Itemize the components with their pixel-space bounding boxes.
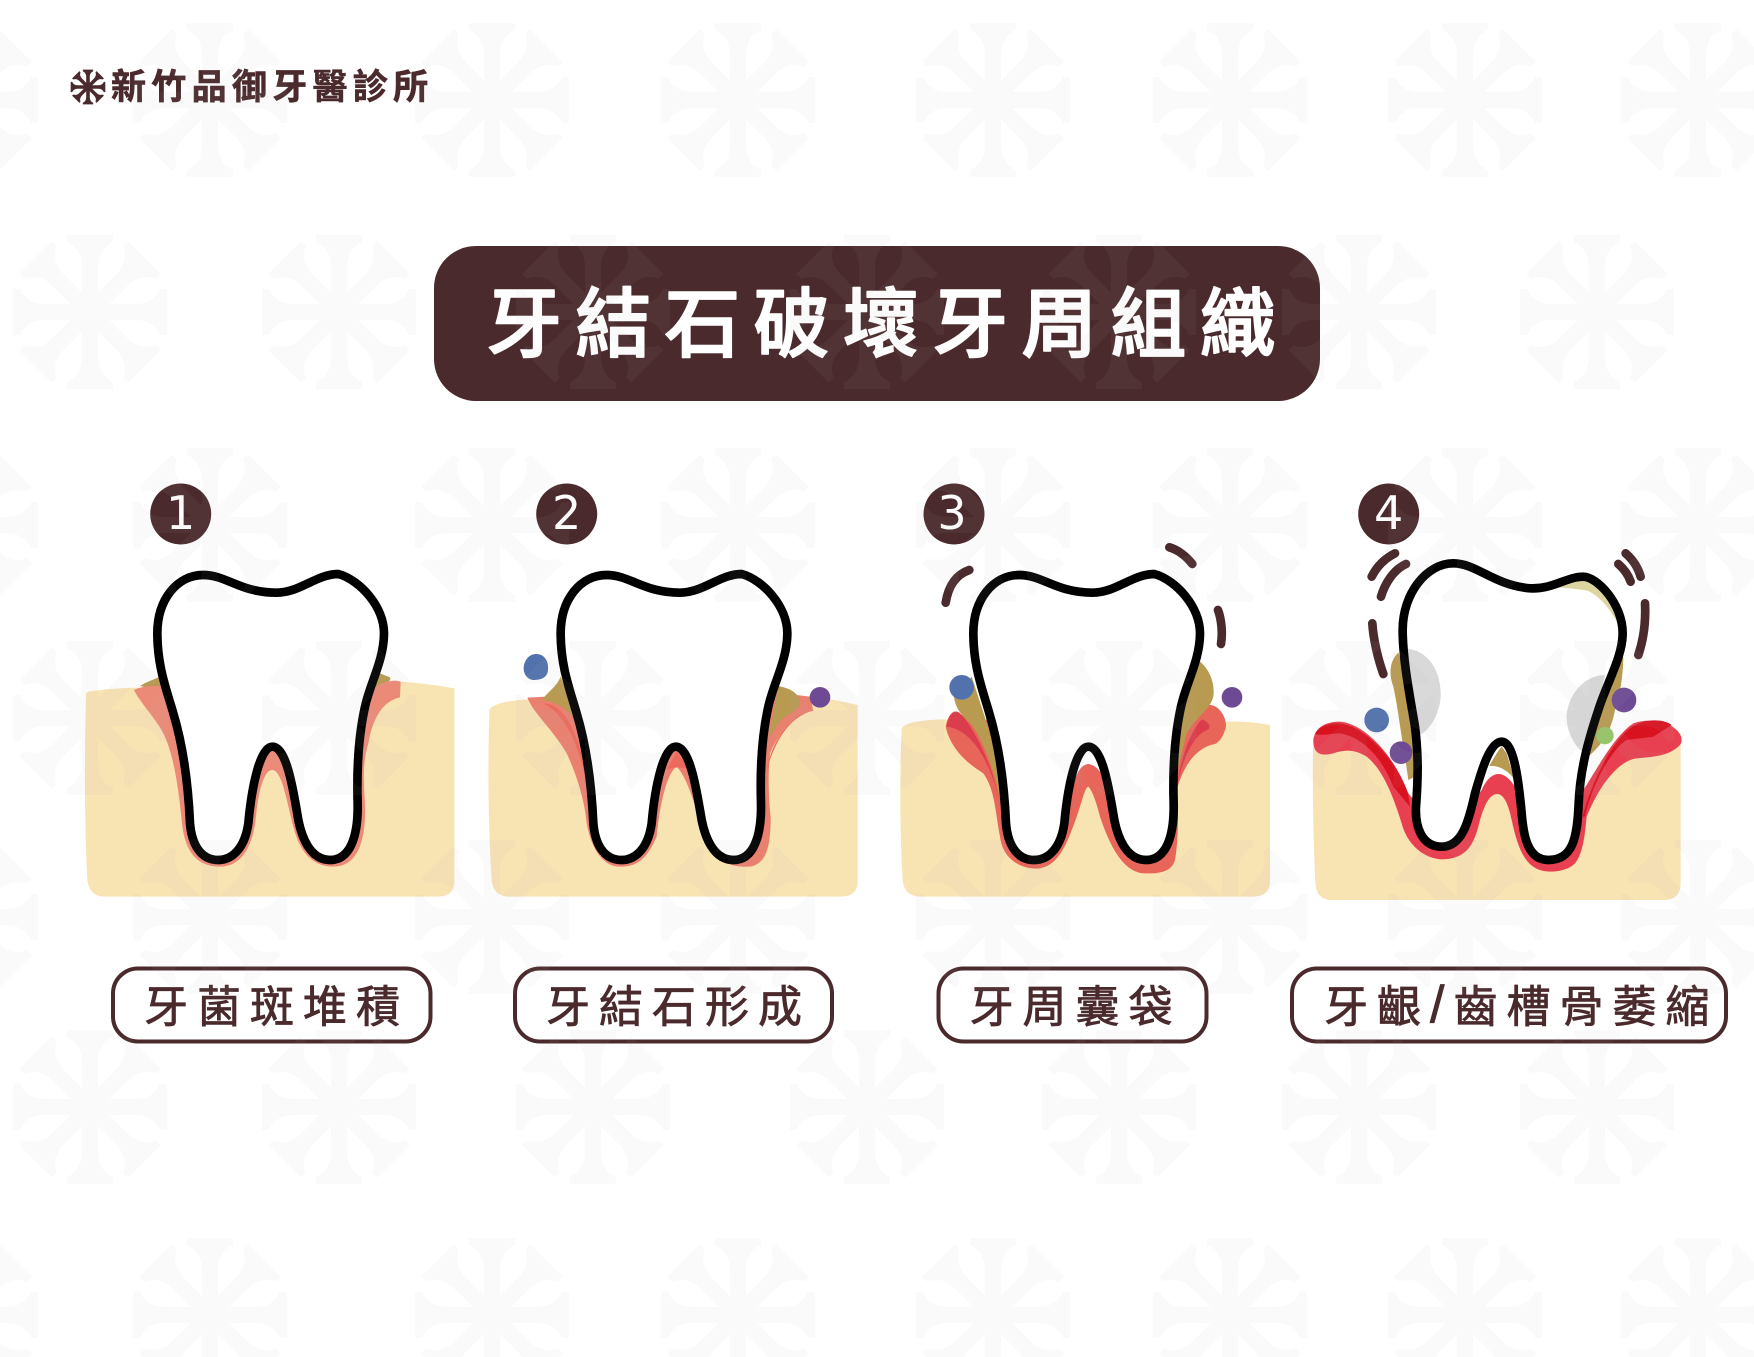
title background [434, 246, 1320, 401]
title text: 牙結石破壞牙周組織 [486, 283, 1289, 368]
step badge 2 [536, 484, 597, 544]
bacteria: purple left [1390, 741, 1412, 764]
step badge 3: 3 [937, 486, 967, 540]
motion arcs [1372, 553, 1645, 674]
label 2: calculus formation [515, 968, 832, 1042]
tooth fill [1403, 563, 1623, 860]
bacteria: blue [524, 654, 548, 680]
deep red gum margin [1315, 720, 1672, 817]
panel 3: periodontal pocket [900, 547, 1270, 897]
step badge 3 [924, 484, 984, 544]
logo: clinic name [71, 68, 433, 107]
step badge 1: 1 [166, 486, 195, 540]
bacteria: purple right [1612, 688, 1636, 712]
step badge 1 [150, 484, 211, 544]
calculus [542, 677, 800, 740]
label 1: plaque buildup: 牙菌斑堆積 [144, 983, 409, 1032]
step badge 4: 4 [1374, 486, 1403, 540]
label 3: periodontal pocket [938, 968, 1206, 1042]
bone [900, 719, 1270, 897]
calculus [1391, 653, 1623, 780]
title banner [434, 246, 1320, 401]
panel 4: gum and bone recession [1313, 553, 1682, 900]
tooth outline [1403, 563, 1623, 860]
label 3: periodontal pocket: 牙周囊袋 [970, 983, 1182, 1032]
bone [1313, 733, 1681, 900]
white gap between roots [1067, 737, 1113, 790]
bacteria: blue [949, 675, 974, 700]
bacteria: green [1596, 727, 1614, 744]
step badge 2: 2 [552, 486, 581, 540]
panel 1: plaque buildup [85, 574, 454, 897]
clinic name text: 新竹品御牙醫診所 [111, 68, 433, 107]
bone [85, 682, 454, 897]
logo star icon [71, 70, 105, 104]
calculus [140, 673, 390, 693]
gum [527, 693, 813, 867]
motion arcs [946, 547, 1222, 644]
panel 2: calculus formation [488, 574, 858, 897]
gum [946, 703, 1226, 873]
label 4: gum and bone recession: 牙齦/齒槽骨萎縮 [1324, 976, 1718, 1034]
calculus [954, 662, 1214, 800]
bacteria: purple [810, 687, 830, 708]
inner gum [543, 703, 812, 787]
tooth [157, 574, 384, 860]
plaque on crown [1553, 579, 1619, 625]
red inflamed gum [947, 712, 1210, 798]
gray decay patches [1405, 648, 1605, 752]
gum [134, 681, 401, 867]
tooth [561, 574, 787, 860]
step badge 4 [1358, 484, 1419, 544]
bone [488, 697, 858, 897]
label 1: plaque buildup [113, 968, 430, 1042]
bacteria: blue [1364, 708, 1389, 732]
label 2: calculus formation: 牙結石形成 [546, 983, 811, 1032]
tooth [973, 574, 1200, 860]
gum [1313, 721, 1682, 872]
bacteria: purple [1222, 687, 1242, 708]
